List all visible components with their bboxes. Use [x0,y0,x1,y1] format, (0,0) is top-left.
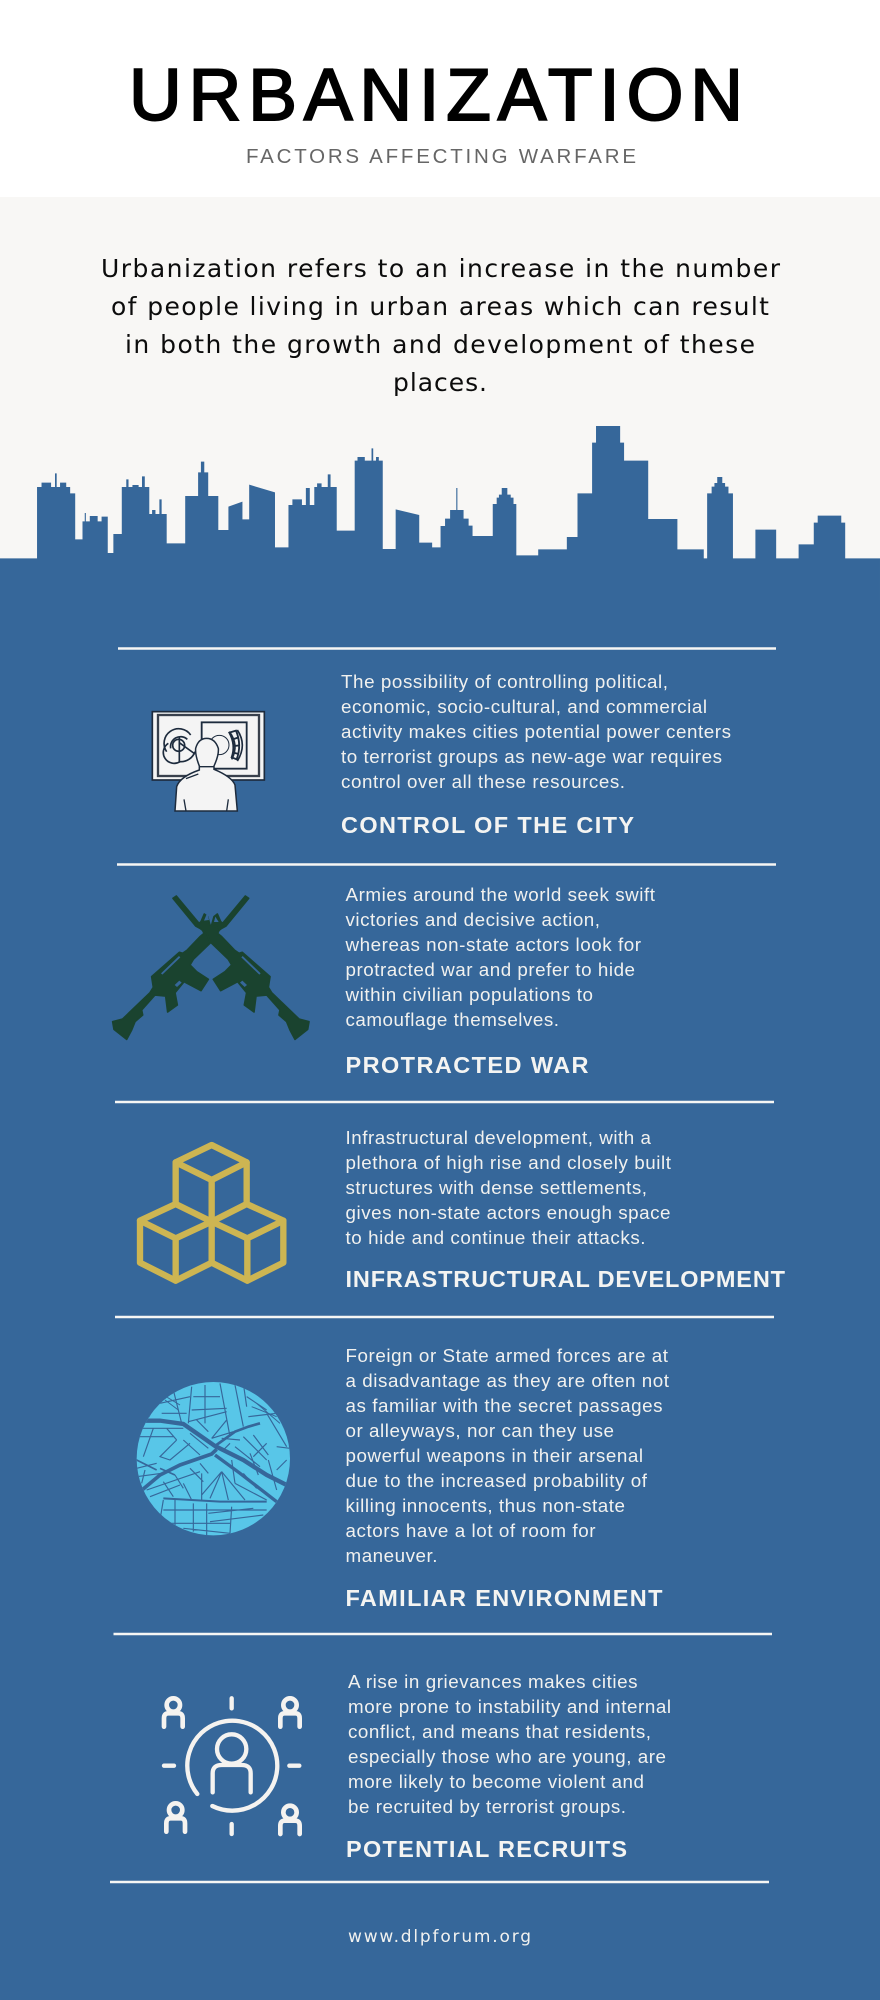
body text [348,1671,671,1817]
city skyline and blue background [0,426,880,2000]
body text: especially those who are young, are [348,1746,666,1767]
body text: or alleyways, nor can they use [346,1420,614,1441]
body text: Armies around the world seek swift [346,884,656,905]
body text: due to the increased probability of [346,1470,648,1491]
body text: activity makes cities potential power centers [341,721,731,742]
heading: INFRASTRUCTURAL DEVELOPMENT [346,1266,786,1292]
icon: crossed rifles [113,896,309,1039]
body text: Infrastructural development, with a [346,1127,652,1148]
body text: gives non-state actors enough space [346,1202,670,1223]
body text: protracted war and prefer to hide [346,959,635,980]
panel: infrastructural development [140,1127,786,1292]
icon: stacked cubes [140,1145,283,1281]
body text: actors have a lot of room for [346,1520,596,1541]
intro paragraph: places. [393,368,487,397]
subtitle: FACTORS AFFECTING WARFARE [246,145,636,168]
body text: whereas non-state actors look for [344,934,641,955]
body text: killing innocents, thus non-state [346,1495,625,1516]
body text [344,884,656,1030]
body text: plethora of high rise and closely built [346,1152,672,1173]
body text: A rise in grievances makes cities [348,1671,638,1692]
icon: street map circle [130,1380,293,1540]
body text: maneuver. [346,1545,438,1566]
body text: conflict, and means that residents, [348,1721,651,1742]
heading: FAMILIAR ENVIRONMENT [346,1585,663,1611]
body text: more likely to become violent and [348,1771,644,1792]
icon: people network [164,1698,300,1834]
body text: The possibility of controlling political, [341,671,668,692]
title: URBANIZATION [129,55,743,136]
panel: protracted war [113,884,656,1078]
body text: more prone to instability and internal [348,1696,671,1717]
body text: powerful weapons in their arsenal [346,1445,643,1466]
body text: as familiar with the secret passages [346,1395,662,1416]
heading: POTENTIAL RECRUITS [346,1836,627,1862]
body text: control over all these resources. [341,771,625,792]
intro paragraph: Urbanization refers to an increase in the number [101,254,781,283]
heading: CONTROL OF THE CITY [341,812,634,838]
intro paragraph [101,254,781,397]
body text: Foreign or State armed forces are at [346,1345,669,1366]
body text: structures with dense settlements, [346,1177,647,1198]
intro paragraph: in both the growth and development of these [125,330,755,359]
body text: camouflage themselves. [346,1009,559,1030]
footer url: www.dlpforum.org [348,1927,531,1947]
panel: control of the city [152,671,731,838]
body text [346,1127,672,1248]
body text: a disadvantage as they are often not [346,1370,670,1391]
body text: be recruited by terrorist groups. [348,1796,626,1817]
panel: potential recruits [164,1671,671,1862]
heading: PROTRACTED WAR [346,1052,589,1078]
panel: familiar environment [130,1345,670,1611]
body text: economic, socio-cultural, and commercial [341,696,707,717]
body text: within civilian populations to [344,984,593,1005]
intro paragraph: of people living in urban areas which can result [111,292,769,321]
body text: to hide and continue their attacks. [346,1227,646,1248]
body text [346,1345,670,1566]
icon: person at monitor [152,712,264,811]
body text: victories and decisive action, [346,909,600,930]
body text [341,671,731,792]
body text: to terrorist groups as new-age war requires [341,746,722,767]
